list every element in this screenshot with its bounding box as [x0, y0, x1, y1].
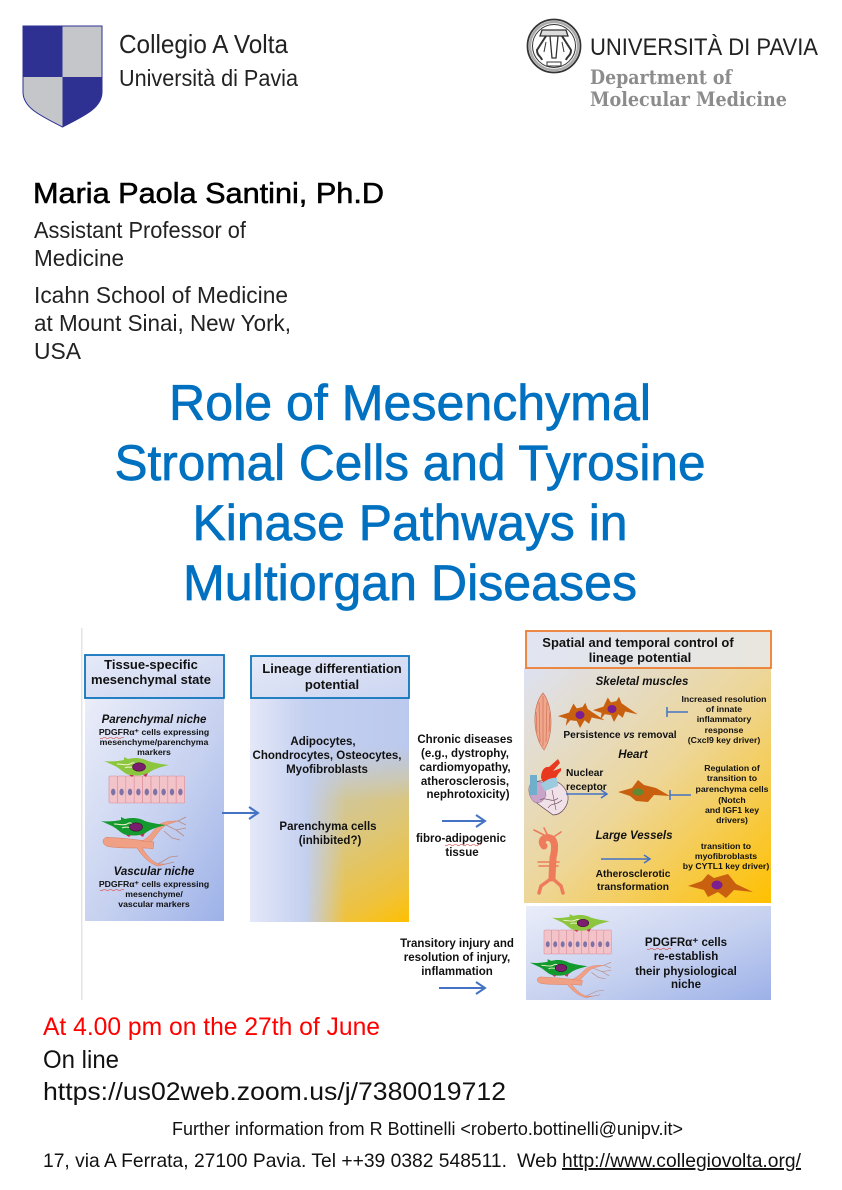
icon: muscle [535, 693, 551, 750]
text: parenchyma transition: parenchyma cells [696, 784, 769, 794]
section: large vessels: transformation [597, 882, 669, 893]
text: physiological niche: their physiological [635, 966, 737, 978]
heading: lineage differentiation potential: Lineage differentiation [262, 661, 402, 676]
text: vascular niche: PDGFRα⁺ cells expressing [99, 879, 209, 889]
text: parenchymal niche: PDGFRα⁺ cells expressing [99, 727, 209, 737]
heading: spatial and temporal control: lineage potential [589, 650, 691, 665]
zoom link: https://us02web.zoom.us/j/7380019712 [43, 1078, 506, 1106]
panel: tissue-specific mesenchymal state [85, 655, 224, 921]
icon: heart [529, 759, 568, 815]
text: parenchyma transition [696, 763, 769, 825]
title: Multiorgan Diseases [183, 555, 637, 611]
text: parenchymal niche: markers [137, 747, 171, 757]
section: skeletal muscles [535, 676, 766, 750]
panel: lineage differentiation potential [250, 656, 409, 922]
arrow: chronic diseases outcome [442, 815, 485, 827]
text: fibro-adipogenic tissue [416, 833, 507, 859]
text: chronic diseases: Chronic diseases [417, 734, 513, 746]
arrow: atherosclerotic transformation [601, 855, 650, 863]
address and website: Web [517, 1150, 557, 1172]
icon: inhibition bar [667, 707, 688, 717]
icon: orange cells [558, 697, 638, 728]
heading: spatial and temporal control: Spatial and temporal control of [542, 635, 734, 650]
diagram: mesenchymal lineage pathways [81, 628, 771, 1000]
section: large vessels: Atherosclerotic [596, 869, 671, 880]
text: physiological niche: PDGFRα⁺ cells [645, 937, 727, 949]
text: innate inflammatory response [682, 694, 766, 745]
section: large vessels: Large Vessels [596, 830, 672, 842]
text: differentiated cell types: Myofibroblasts [286, 764, 368, 776]
title: Kinase Pathways in [192, 495, 628, 551]
address and website [43, 1150, 802, 1172]
text: department name: Department of [590, 65, 733, 89]
text: parenchyma cells: (inhibited?) [299, 835, 361, 847]
section: heart: Nuclear [566, 768, 603, 779]
speaker affiliation: Icahn School of Medicine [34, 282, 288, 308]
icon: cells in niche [530, 914, 611, 998]
text: myofibroblast transition [683, 841, 769, 871]
text: innate inflammatory response: response [705, 725, 743, 735]
section: heart: receptor [566, 782, 607, 793]
text: vascular niche: mesenchyme/ [125, 889, 183, 899]
icon: vascular fibroblast on vessel [101, 817, 186, 866]
text: innate inflammatory response: inflammatory [697, 714, 751, 724]
text: differentiated cell types: Adipocytes, [290, 736, 356, 748]
text: differentiated cell types [253, 736, 401, 776]
speaker affiliation: at Mount Sinai, New York, [34, 310, 291, 336]
arrow: state to differentiation [222, 807, 258, 819]
text: parenchyma transition: drivers) [716, 815, 748, 825]
text: parenchymal niche: Parenchymal niche [102, 714, 207, 726]
text: physiological niche [635, 937, 737, 991]
text: innate inflammatory response: of innate [706, 704, 742, 714]
speaker affiliation: Assistant Professor of [34, 217, 246, 243]
speaker name: Maria Paola Santini, Ph.D [33, 178, 384, 210]
heading: tissue-specific mesenchymal state: mesenchymal state [91, 672, 211, 687]
icon: Collegio Volta shield [23, 26, 102, 127]
event location: On line [43, 1046, 119, 1074]
heading: lineage differentiation potential: potential [305, 677, 359, 692]
speaker affiliation: Medicine [34, 245, 124, 271]
event date: At 4.00 pm on the 27th of June [43, 1013, 380, 1041]
arrow: resolution [439, 982, 485, 994]
section: skeletal muscles: Persistence vs removal [563, 730, 677, 741]
text: transitory injury: Transitory injury and [400, 938, 514, 950]
address and website: 17, via A Ferrata, 27100 Pavia. Tel ++39 0382 548511. [43, 1150, 507, 1172]
icon: orange cell with green nucleus [618, 780, 670, 802]
text: chronic diseases: cardiomyopathy, [419, 762, 511, 774]
heading: tissue-specific mesenchymal state: Tissue-specific [104, 657, 198, 672]
further information: Further information from R Bottinelli <roberto.bottinelli@unipv.it> [172, 1119, 683, 1139]
section: heart: Heart [618, 749, 649, 761]
heading: tissue-specific mesenchymal state [85, 655, 224, 698]
text: chronic diseases: nephrotoxicity) [426, 789, 510, 801]
icon: inhibition bar [670, 790, 691, 800]
text: fibro-adipogenic tissue: fibro-adipogenic [416, 833, 507, 845]
text: Collegio A Volta: Collegio A Volta [119, 29, 288, 59]
text: parenchyma cells: Parenchyma cells [279, 821, 377, 833]
text: parenchyma transition: transition to [707, 773, 757, 783]
text: physiological niche: re-establish [654, 951, 718, 963]
text: transitory injury: resolution of injury, [404, 952, 510, 964]
arrow: nuclear receptor [566, 790, 607, 798]
icon: Università di Pavia seal [528, 20, 580, 72]
text: vascular niche [99, 866, 209, 909]
heading: lineage differentiation potential [251, 656, 409, 698]
heading: spatial and temporal control [526, 631, 771, 668]
text: myofibroblast transition: transition to [701, 841, 751, 851]
text: innate inflammatory response: (Cxcl9 key driver) [688, 735, 760, 745]
text: chronic diseases [417, 734, 513, 801]
icon: aorta [534, 828, 563, 893]
title [114, 375, 706, 611]
icon: parenchymal fibroblast on epithelial cells [104, 757, 185, 803]
title: Role of Mesenchymal [169, 375, 651, 431]
text: parenchymal niche [99, 714, 209, 757]
text: parenchyma transition: Regulation of [704, 763, 760, 773]
speaker affiliation [34, 217, 291, 364]
text: UNIVERSITÀ DI PAVIA: UNIVERSITÀ DI PAVIA [590, 34, 818, 61]
panel: re-established niche [526, 906, 771, 1000]
text: parenchyma transition: (Notch [718, 795, 746, 805]
icon: myofibroblast [688, 874, 753, 898]
speaker affiliation: USA [34, 338, 81, 364]
title: Stromal Cells and Tyrosine [114, 435, 706, 491]
text: parenchyma cells [279, 821, 377, 847]
text: Università di Pavia: Università di Pavia [119, 65, 299, 91]
text: myofibroblast transition: myofibroblasts [695, 851, 757, 861]
text: department name: Molecular Medicine [590, 87, 787, 111]
text: parenchymal niche: mesenchyme/parenchyma [100, 737, 208, 747]
section: large vessels [534, 828, 769, 898]
text: parenchyma transition: and IGF1 key [705, 805, 759, 815]
panel: spatial and temporal control [524, 631, 771, 903]
text: chronic diseases: (e.g., dystrophy, [421, 748, 509, 760]
text: fibro-adipogenic tissue: tissue [445, 847, 479, 859]
address and website: http://www.collegiovolta.org/ [562, 1150, 802, 1172]
section: heart [529, 749, 769, 825]
text: physiological niche: niche [671, 979, 701, 991]
text: transitory injury: inflammation [421, 966, 493, 978]
text: vascular niche: vascular markers [118, 899, 190, 909]
text: myofibroblast transition: by CYTL1 key driver) [683, 861, 769, 871]
text: chronic diseases: atherosclerosis, [421, 776, 509, 788]
text: innate inflammatory response: Increased resolution [682, 694, 766, 704]
text: differentiated cell types: Chondrocytes, Osteocytes, [253, 750, 401, 762]
section: skeletal muscles: Skeletal muscles [596, 676, 688, 688]
text: transitory injury [400, 938, 514, 978]
text: vascular niche: Vascular niche [114, 866, 195, 878]
text: department name [590, 65, 787, 111]
